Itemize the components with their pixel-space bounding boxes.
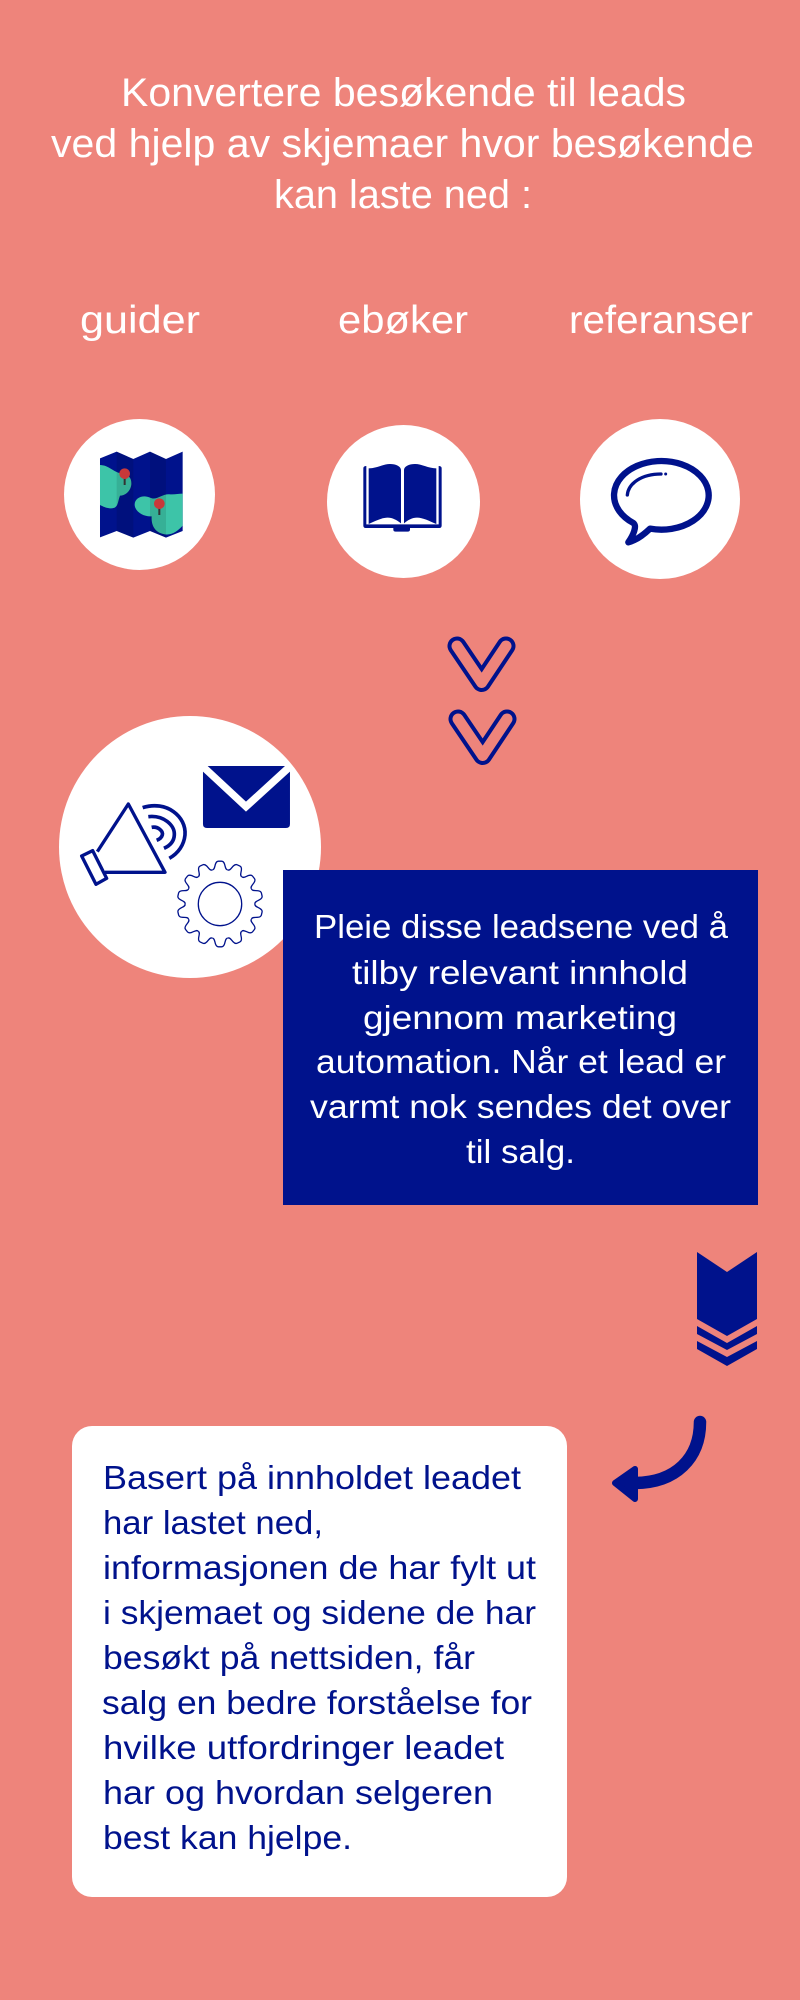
title: Konvertere besøkende til leads <box>121 71 686 115</box>
panel: sales insight text box: besøkt på nettsiden, får <box>103 1639 475 1676</box>
panel: marketing automation text box: gjennom marketing <box>363 999 677 1036</box>
label: ebøker: ebøker <box>338 299 468 342</box>
panel: sales insight text box: i skjemaet og sidene de har <box>103 1594 536 1631</box>
arrow: outlined chevron 1 <box>457 646 506 682</box>
panel: sales insight text box: best kan hjelpe. <box>103 1819 352 1856</box>
panel: sales insight text box: har og hvordan selgeren <box>103 1774 493 1811</box>
panel: marketing automation text box <box>283 870 758 1205</box>
icon group: marketing automation circle <box>59 716 321 978</box>
title: ved hjelp av skjemaer hvor besøkende <box>51 122 754 166</box>
icon: speech bubble in white circle <box>580 419 740 579</box>
panel: marketing automation text box: automation. Når et lead er <box>316 1043 726 1080</box>
arrow: solid downward chevron <box>697 1252 757 1366</box>
icon: megaphone <box>82 804 185 884</box>
title: kan laste ned : <box>274 173 532 217</box>
panel: sales insight text box: informasjonen de har fylt ut <box>103 1549 536 1586</box>
panel: sales insight text box: har lastet ned, <box>103 1504 323 1541</box>
arrow: outlined chevron 2 <box>458 719 507 756</box>
label: guider: guider <box>80 299 200 342</box>
icon: open book in white circle <box>327 425 480 578</box>
panel: sales insight text box: hvilke utfordringer leadet <box>103 1729 504 1766</box>
icon: gear <box>177 861 263 947</box>
icon: map in white circle <box>64 419 215 570</box>
panel: sales insight text box: Basert på innholdet leadet <box>103 1459 521 1496</box>
panel: sales insight text box <box>72 1426 567 1897</box>
label: referanser: referanser <box>569 299 753 342</box>
panel: sales insight text box: salg en bedre forståelse for <box>102 1684 532 1721</box>
icon: envelope <box>203 766 290 828</box>
panel: marketing automation text box: tilby relevant innhold <box>352 954 688 991</box>
panel: marketing automation text box: til salg. <box>466 1133 575 1170</box>
panel: marketing automation text box: Pleie disse leadsene ved å <box>314 908 729 945</box>
panel: marketing automation text box: varmt nok sendes det over <box>310 1088 731 1125</box>
arrow: curved left arrow <box>615 1422 700 1499</box>
title <box>51 71 754 217</box>
